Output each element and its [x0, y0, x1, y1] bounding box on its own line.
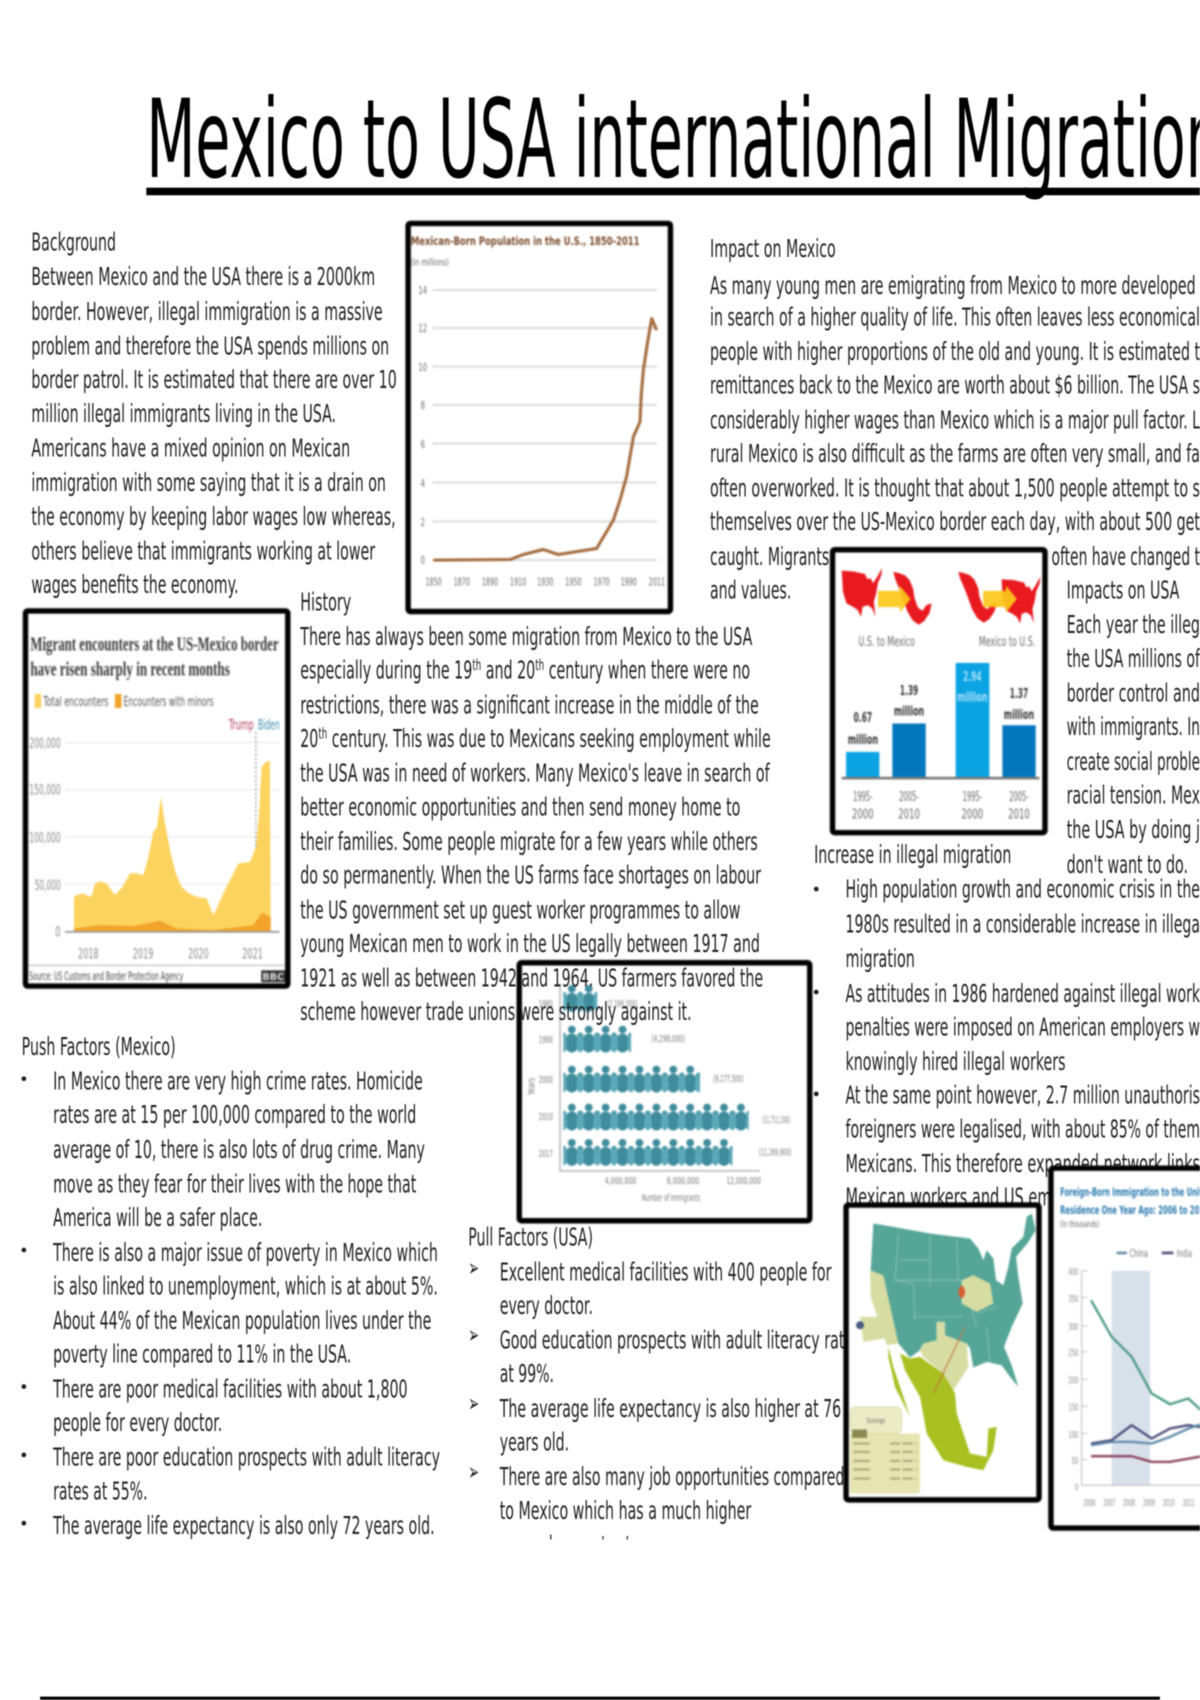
text block: background: problem and therefore the USA spends millions on [31, 332, 389, 361]
year and value labels: (2,199,200) [607, 999, 637, 1010]
gridlines and axis labels: 1950 [565, 577, 582, 589]
year and value labels: (9,177,500) [713, 1074, 744, 1085]
axis labels: 200 [1068, 1376, 1078, 1387]
text block: impacts on USA [1067, 576, 1200, 879]
text block: background: border patrol. It is estimated that there are over 10 [31, 365, 397, 394]
year and value labels: 2010 [539, 1112, 553, 1123]
bar labels: 2010 [898, 808, 920, 823]
gridlines and axis labels: 2011 [649, 577, 665, 589]
year and value labels: 12,000,000 [726, 1176, 761, 1187]
panel: pictogram of immigrants: (11,711,100) [762, 1115, 790, 1126]
chart heading: Migrant encounters at the US-Mexico border [30, 635, 279, 656]
axis labels: 300 [1068, 1322, 1078, 1333]
text block: impact on Mexico: caught. Migrants [710, 542, 829, 571]
year and value labels: Years [526, 1078, 537, 1096]
axis labels: 2009 [1143, 1498, 1155, 1509]
text block: history: the US government set up guest worker programmes to allow [300, 895, 740, 924]
bar labels: 2005- [1009, 790, 1029, 805]
legend: Total encounters [43, 695, 109, 710]
year and value labels: (11,269,900) [759, 1148, 791, 1159]
year and value labels: (4,298,000) [651, 1034, 685, 1045]
axis labels [1068, 1267, 1195, 1509]
chart title: Mexican-Born Population in the U.S., 1850-2011 [411, 234, 640, 248]
legend: China [1130, 1247, 1148, 1260]
text block: background: million illegal immigrants living in the USA. [31, 399, 336, 428]
text block: push factors: average of 10, there is also lots of drug crime. Many [53, 1135, 425, 1164]
gridlines and axis labels: (in millions) [411, 258, 449, 269]
chart heading: (In thousands) [1060, 1220, 1099, 1230]
gridlines and axis labels: 1990 [621, 577, 637, 589]
text block: pull factors: to Mexico which has a much higher [500, 1496, 752, 1525]
gridlines and axis labels: 10 [418, 361, 427, 374]
minors area [74, 913, 271, 932]
gridlines and axis labels: 1850 [425, 577, 442, 589]
bar labels: 2000 [852, 808, 874, 823]
gridlines and axis labels: 1970 [593, 577, 610, 589]
axis labels: 100,000 [29, 830, 61, 846]
gridlines and axis labels: 0 [421, 554, 425, 567]
gridlines and axis labels: 1890 [482, 577, 498, 589]
text block: pull factors: Good education prospects with adult literacy rat [500, 1326, 845, 1355]
year and value labels: 8,000,000 [667, 1176, 699, 1187]
axis labels: 50 [1072, 1456, 1078, 1467]
text block: background: wages benefits the economy. [31, 570, 238, 599]
axis labels [29, 736, 263, 962]
axis labels: 150,000 [29, 783, 61, 799]
map legend [850, 1407, 920, 1494]
text block: history: restrictions, there was a significant increase in the middle of the [300, 690, 759, 719]
text block: impact on Mexico: and values. [710, 576, 791, 605]
bar labels [848, 635, 1035, 823]
text block: pull factors: every doctor. [500, 1291, 593, 1320]
chart heading: have risen sharply in recent months [30, 659, 230, 680]
axis labels: 2010 [1163, 1498, 1175, 1509]
text block: push factors: people for every doctor. [53, 1408, 222, 1437]
source: Source: US Customs and Border Protection Agency [29, 969, 183, 983]
bar labels: 1995- [963, 790, 982, 805]
text block: history: th [535, 656, 544, 674]
gridlines and axis labels: 2 [421, 516, 425, 529]
text block: history: There has always been some migration from Mexico to the USA [300, 622, 752, 651]
axis labels: 100 [1068, 1430, 1078, 1441]
source: BBC [262, 972, 284, 983]
pictogram rows 1980 to 2017 [563, 984, 749, 1167]
text block: pull factors: at 99%. [500, 1359, 554, 1388]
year and value labels: 1990 [539, 1035, 553, 1046]
text block: pull factors: years old. [500, 1428, 569, 1457]
axis labels: 2020 [188, 946, 209, 962]
axis labels: 2006 [1083, 1498, 1095, 1509]
axis labels: 2019 [133, 946, 153, 962]
year and value labels: Number of Immigrants [642, 1193, 700, 1204]
year and value labels: 1980 [539, 999, 553, 1010]
population curve [433, 319, 657, 560]
bar labels: 1995- [853, 790, 873, 805]
legend [1117, 1247, 1192, 1260]
axes [560, 983, 760, 1171]
chart heading [1060, 1185, 1200, 1230]
text block: background: border. However, illegal immigration is a massive [31, 297, 383, 326]
text block: history: the USA was in need of workers. Many Mexico's leave in search of [300, 759, 770, 788]
gridlines and axis labels: 6 [421, 438, 425, 451]
map legend: Durango [867, 1417, 885, 1425]
gridlines and axis labels: 4 [421, 477, 425, 490]
panel: pictogram of immigrants [519, 963, 810, 1221]
panel: Mexican-born population line chart [408, 223, 670, 612]
Mexico landmass [888, 1347, 997, 1470]
bars [842, 663, 1039, 779]
bar labels: Mexico to U.S. [979, 635, 1035, 650]
text block: push factors: Push Factors (Mexico) [22, 1032, 176, 1061]
bar labels: million [848, 733, 878, 748]
text block: pull factors: ➢ [468, 1458, 479, 1486]
axis labels: 0 [55, 925, 61, 941]
text block: pull factors: Pull Factors (USA) [468, 1223, 593, 1252]
axis labels: 2021 [242, 946, 263, 962]
year and value labels [526, 999, 791, 1204]
axis labels: 2008 [1123, 1498, 1135, 1509]
text block: history: young Mexican men to work in the US legally between 1917 and [300, 929, 760, 958]
text block: history: th [318, 724, 327, 742]
year and value labels: 4,000,000 [605, 1176, 636, 1187]
text block: background: Between Mexico and the USA there is a 2000km [31, 262, 375, 291]
text block: push factors: There is also a major issue of poverty in Mexico which [53, 1238, 438, 1267]
text block: increase in illegal migration: Mexican workers and US em [846, 1183, 1051, 1212]
gridlines and axis labels: 8 [421, 399, 425, 412]
migrant corridor regions [860, 1270, 993, 1390]
panel: migration flow bar chart [833, 550, 1045, 833]
text block: history: especially during the 19 [300, 656, 601, 685]
axis labels: 350 [1068, 1294, 1078, 1305]
text block: pull factors: There are also many job opportunities compared [499, 1462, 844, 1491]
bar labels: 2.94 [963, 670, 982, 685]
presidency labels: Trump [228, 718, 254, 734]
text block: history: century when there were no [544, 656, 750, 685]
icon: Mexico to US map with arrow [958, 572, 1040, 624]
text block: background: Background [31, 228, 116, 257]
text block: history: better economic opportunities and then send money home to [300, 792, 740, 821]
bar labels: 0.67 [854, 711, 872, 726]
text block: background: Americans have a mixed opinion on Mexican [31, 434, 350, 463]
bar labels: 2010 [1008, 808, 1030, 823]
text block: increase in illegal migration: Increase in illegal migration [814, 840, 1011, 869]
text block: history: th [472, 656, 481, 674]
text block: history: their families. Some people migrate for a few years while others [300, 827, 758, 856]
text block: pull factors [468, 1223, 845, 1560]
axis labels: 200,000 [29, 736, 61, 752]
bar labels: million [957, 690, 988, 705]
gridlines and axis labels [411, 258, 665, 589]
bar labels: million [894, 705, 924, 720]
bar labels: U.S. to Mexico [859, 635, 915, 650]
axis labels: 50,000 [35, 878, 61, 894]
text block: background: the economy by keeping labor wages low whereas, [31, 502, 396, 531]
legend [35, 694, 214, 710]
text block: push factors: About 44% of the Mexican population lives under the [53, 1306, 431, 1335]
text block: history: History [300, 587, 351, 616]
bar labels: 1.37 [1010, 687, 1028, 702]
text block: pull factors: ➢ [468, 1321, 479, 1349]
text block: history [300, 587, 771, 1026]
bar labels: million [1004, 708, 1034, 723]
panel: foreign-born immigration line chart [1051, 1168, 1200, 1528]
text block: push factors: There are poor medical facilities with about 1,800 [53, 1374, 408, 1403]
gridlines and axis labels: 14 [418, 284, 427, 297]
text block: push factors: There are poor education prospects with adult literacy [53, 1443, 440, 1472]
text block: increase in illegal migration [814, 840, 1200, 1212]
text block: push factors: The average life expectancy is also only 72 years old. [53, 1511, 435, 1540]
recession band [1112, 1271, 1150, 1485]
text block: push factors: is also linked to unemployment, which is at about 5%. [53, 1271, 438, 1300]
bar labels: 1.39 [900, 684, 918, 699]
text block: background [31, 228, 397, 599]
text block: push factors: rates at 55%. [53, 1476, 147, 1505]
axis labels: 0 [1075, 1483, 1078, 1494]
gridlines and axis labels: 1910 [510, 577, 526, 589]
text block: background: others believe that immigrants working at lower [31, 536, 375, 565]
total encounters area [74, 761, 271, 932]
text block: push factors: move as they fear for their lives with the hope that [53, 1170, 416, 1199]
chart heading [30, 635, 279, 680]
text block: pull factors: The average life expectancy is also higher at 76 [499, 1394, 841, 1423]
USA landmass [871, 1214, 1036, 1387]
year and value labels: 2017 [539, 1149, 553, 1160]
axis labels: 400 [1068, 1267, 1078, 1278]
bar labels: 2000 [962, 808, 983, 823]
data lines [1091, 1300, 1200, 1462]
text block: push factors: rates are at 15 per 100,000 compared to the world [53, 1100, 416, 1129]
gridlines and axis labels: 1930 [537, 577, 553, 589]
text block: history: 1921 as well as between 1942 and 1964. US farmers favored the [300, 964, 763, 993]
axis labels: 2007 [1103, 1498, 1115, 1509]
axis labels: 2018 [78, 946, 99, 962]
text block: push factors [21, 1032, 440, 1540]
text block: history: do so permanently. When the US farms face shortages on labour [300, 861, 761, 890]
text block: impact on Mexico [710, 234, 1200, 605]
text block: push factors: In Mexico there are very high crime rates. Homicide [53, 1067, 423, 1096]
presidency labels: Biden [258, 718, 280, 734]
text block: push factors: America will be a safer place. [53, 1203, 262, 1232]
legend: Encounters with minors [124, 695, 214, 710]
text block: history: and 20 [481, 656, 535, 685]
gridlines and axis labels: 12 [418, 322, 427, 335]
text block: history: scheme however trade unions were strongly against it. [300, 997, 692, 1026]
text block: impact on Mexico: Impact on Mexico [710, 234, 836, 263]
year and value labels: 2000 [539, 1075, 553, 1086]
axis labels: 250 [1068, 1348, 1078, 1359]
source [28, 965, 285, 983]
text block: push factors: poverty line compared to 11% in the USA. [53, 1340, 351, 1369]
panel: migration map [846, 1205, 1039, 1500]
axis labels: 150 [1068, 1403, 1078, 1414]
text block: pull factors: ➢ [468, 1254, 479, 1282]
gridlines and axis labels: 1870 [454, 577, 470, 589]
text block: background: immigration with some saying that it is a drain on [31, 468, 386, 497]
panel: migrant encounters area chart [25, 611, 288, 986]
text block: pull factors: ➢ [468, 1390, 479, 1418]
text block: increase in illegal migration: migration [846, 944, 915, 973]
text block: pull factors: Excellent medical facilities with 400 people for [500, 1257, 832, 1286]
icon: US to Mexico map with arrow [842, 568, 932, 625]
text block: history: century. This was due to Mexicans seeking employment while [327, 724, 771, 753]
footer rule [40, 1697, 1160, 1700]
text block: history: 20 [300, 724, 332, 753]
bar labels: 2005- [899, 790, 919, 805]
text block: pull factors: unemployment rate [500, 1531, 640, 1560]
